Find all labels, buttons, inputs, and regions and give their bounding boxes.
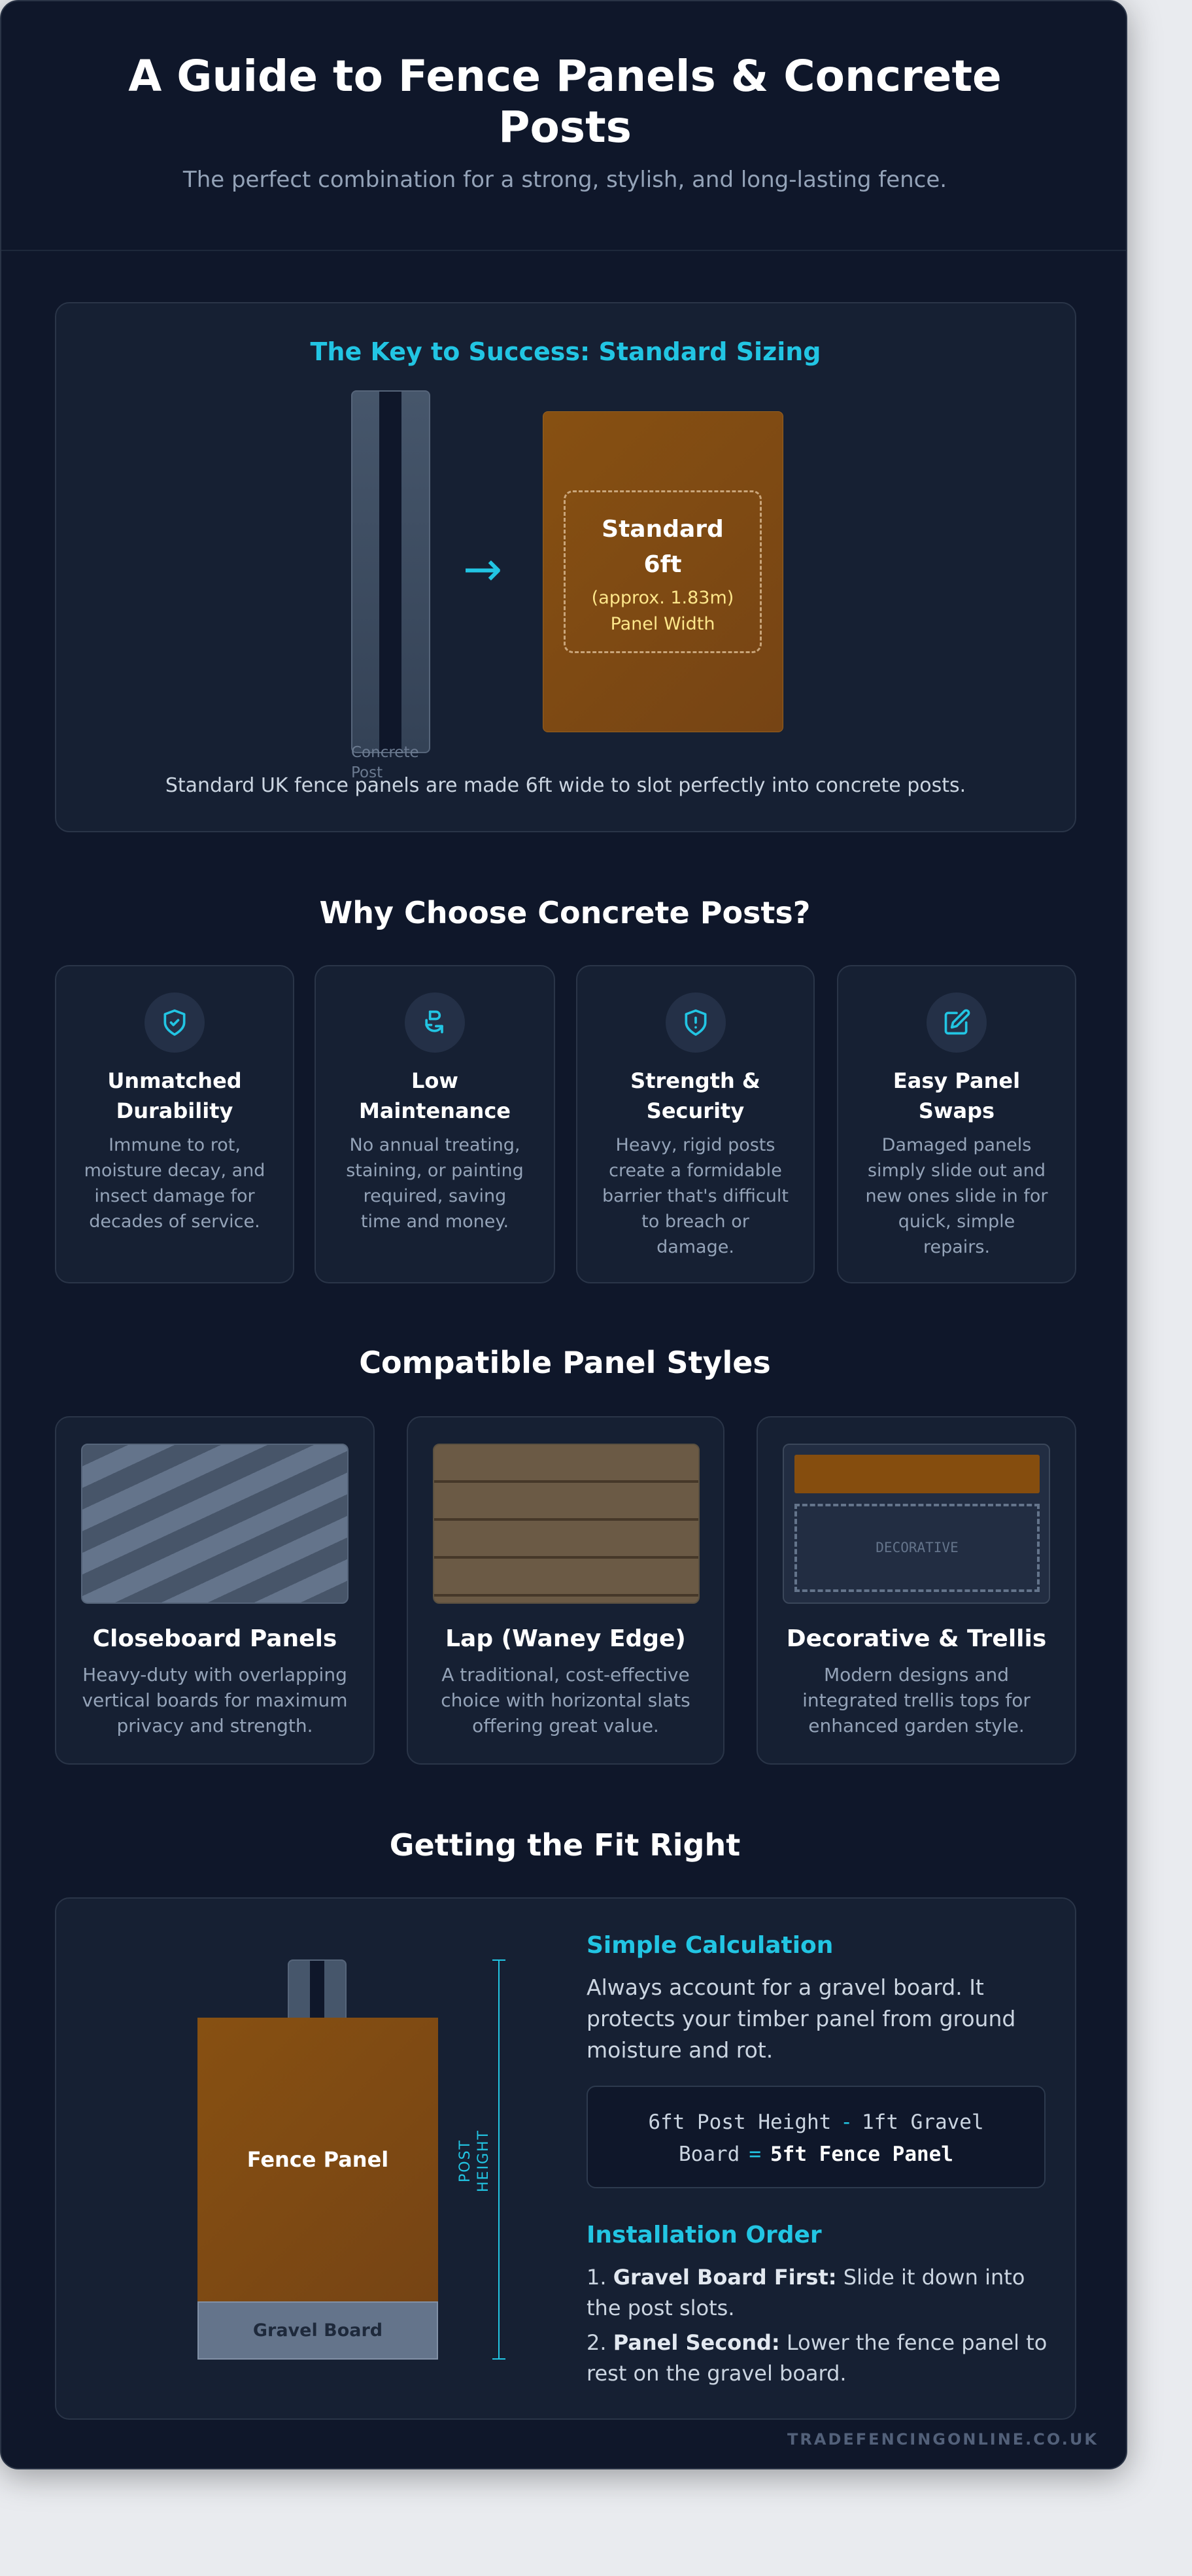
label: concrete post: [351, 744, 419, 781]
heading: panel styles: Compatible Panel Styles: [359, 1345, 771, 1380]
gravel board: [197, 2301, 438, 2360]
feature card: swaps: Swaps: [919, 1098, 995, 1123]
panel: fit diagram and calculation: [55, 1897, 1076, 2420]
feature card: security: Heavy, rigid posts create a formidable barrier that's difficult to breach or damage.: [602, 1135, 789, 1257]
feature card: maintenance: [315, 965, 555, 1283]
post top: [288, 1959, 347, 2031]
icon: edit: [927, 992, 987, 1053]
concrete post: [351, 390, 430, 753]
measure: post height: [457, 1959, 505, 2360]
formula box: 6ft Post Height - 1ft Gravel Board = 5ft Fence Panel: [648, 2110, 984, 2166]
style card: decorative: Decorative & Trellis: [787, 1625, 1046, 1652]
title: Posts: [498, 102, 632, 152]
list: steps: [587, 2265, 1047, 2386]
feature card: maintenance: No annual treating, staining, or painting required, saving time and money.: [346, 1135, 524, 1232]
subtitle: The perfect combination for a strong, stylish, and long-lasting fence.: [183, 167, 947, 193]
dashed label box: Panel Width: [611, 614, 715, 634]
feature card: security: Security: [647, 1098, 744, 1123]
feature card: security: Strength &: [630, 1068, 760, 1093]
dashed label box: Standard: [602, 516, 724, 543]
gravel board: Gravel Board: [253, 2320, 383, 2341]
feature card: swaps: Easy Panel: [893, 1068, 1020, 1093]
feature card: durability: Durability: [116, 1098, 233, 1123]
heading: installation order: Installation Order: [587, 2222, 822, 2248]
style card: closeboard: Heavy-duty with overlapping vertical boards for maximum privacy and strength.: [82, 1664, 348, 1737]
fence panel: [197, 2018, 438, 2301]
feature card: maintenance: Low: [411, 1068, 458, 1093]
feature card: maintenance: Maintenance: [359, 1098, 511, 1123]
title: A Guide to Fence Panels & Concrete: [128, 51, 1002, 101]
feature card: durability: Immune to rot, moisture decay, and insect damage for decades of service.: [84, 1135, 265, 1232]
title: [128, 51, 1002, 152]
dashed label box: 6ft: [644, 551, 681, 578]
icon: refresh: [405, 992, 465, 1053]
heading: fit right: Getting the Fit Right: [390, 1827, 740, 1863]
label: concrete post: Post: [351, 764, 383, 781]
icon: shield check: [145, 992, 205, 1053]
heading: standard sizing: The Key to Success: Standard Sizing: [311, 337, 821, 366]
feature card: durability: [55, 965, 294, 1283]
dashed label box: (approx. 1.83m): [592, 588, 734, 608]
list: steps: 1. Gravel Board First: Slide it down into the post slots.: [587, 2265, 1025, 2320]
image: trellis: DECORATIVE: [876, 1540, 959, 1555]
panel: standard sizing: [55, 302, 1076, 832]
label: concrete post: Concrete: [351, 744, 419, 761]
feature card: durability: Unmatched: [107, 1068, 242, 1093]
icon: shield alert: [666, 992, 726, 1053]
measure: post height: POST: [457, 2139, 473, 2182]
style card: closeboard: Closeboard Panels: [93, 1625, 337, 1652]
style card: closeboard: [55, 1416, 375, 1765]
heading: why concrete posts: Why Choose Concrete Posts?: [319, 895, 811, 930]
style card: lap: Lap (Waney Edge): [445, 1625, 686, 1652]
fence panel: Fence Panel: [247, 2147, 388, 2172]
style card: decorative: [757, 1416, 1076, 1765]
style card: lap: A traditional, cost-effective choice with horizontal slats offering great value.: [441, 1664, 690, 1737]
heading: simple calculation: Simple Calculation: [587, 1932, 833, 1959]
formula box: [587, 2086, 1046, 2188]
caption: Standard UK fence panels are made 6ft wide to slot perfectly into concrete posts.: [165, 774, 966, 797]
feature card: security: [576, 965, 815, 1283]
arrow: →: [463, 541, 502, 596]
wood panel: [543, 411, 783, 732]
image: horizontal slats: [433, 1444, 700, 1604]
style card: decorative: Modern designs and integrated trellis tops for enhanced garden style.: [802, 1664, 1030, 1737]
image: diagonal boards: [81, 1444, 349, 1604]
diagram: post, panel, gravel board: [197, 1959, 438, 2360]
image: trellis: [783, 1444, 1050, 1604]
dashed label box: [564, 490, 762, 653]
feature card: swaps: [837, 965, 1076, 1283]
feature card: swaps: Damaged panels simply slide out and new ones slide in for quick, simple repairs.: [865, 1135, 1047, 1257]
list: steps: 2. Panel Second: Lower the fence panel to rest on the gravel board.: [587, 2330, 1047, 2386]
style card: lap: [407, 1416, 724, 1765]
measure: post height: HEIGHT: [475, 2129, 492, 2192]
text: gravel board advice: Always account for a gravel board. It protects your timber panel from ground moisture and rot.: [587, 1974, 1015, 2063]
footer: website: TRADEFENCINGONLINE.CO.UK: [787, 2430, 1098, 2449]
